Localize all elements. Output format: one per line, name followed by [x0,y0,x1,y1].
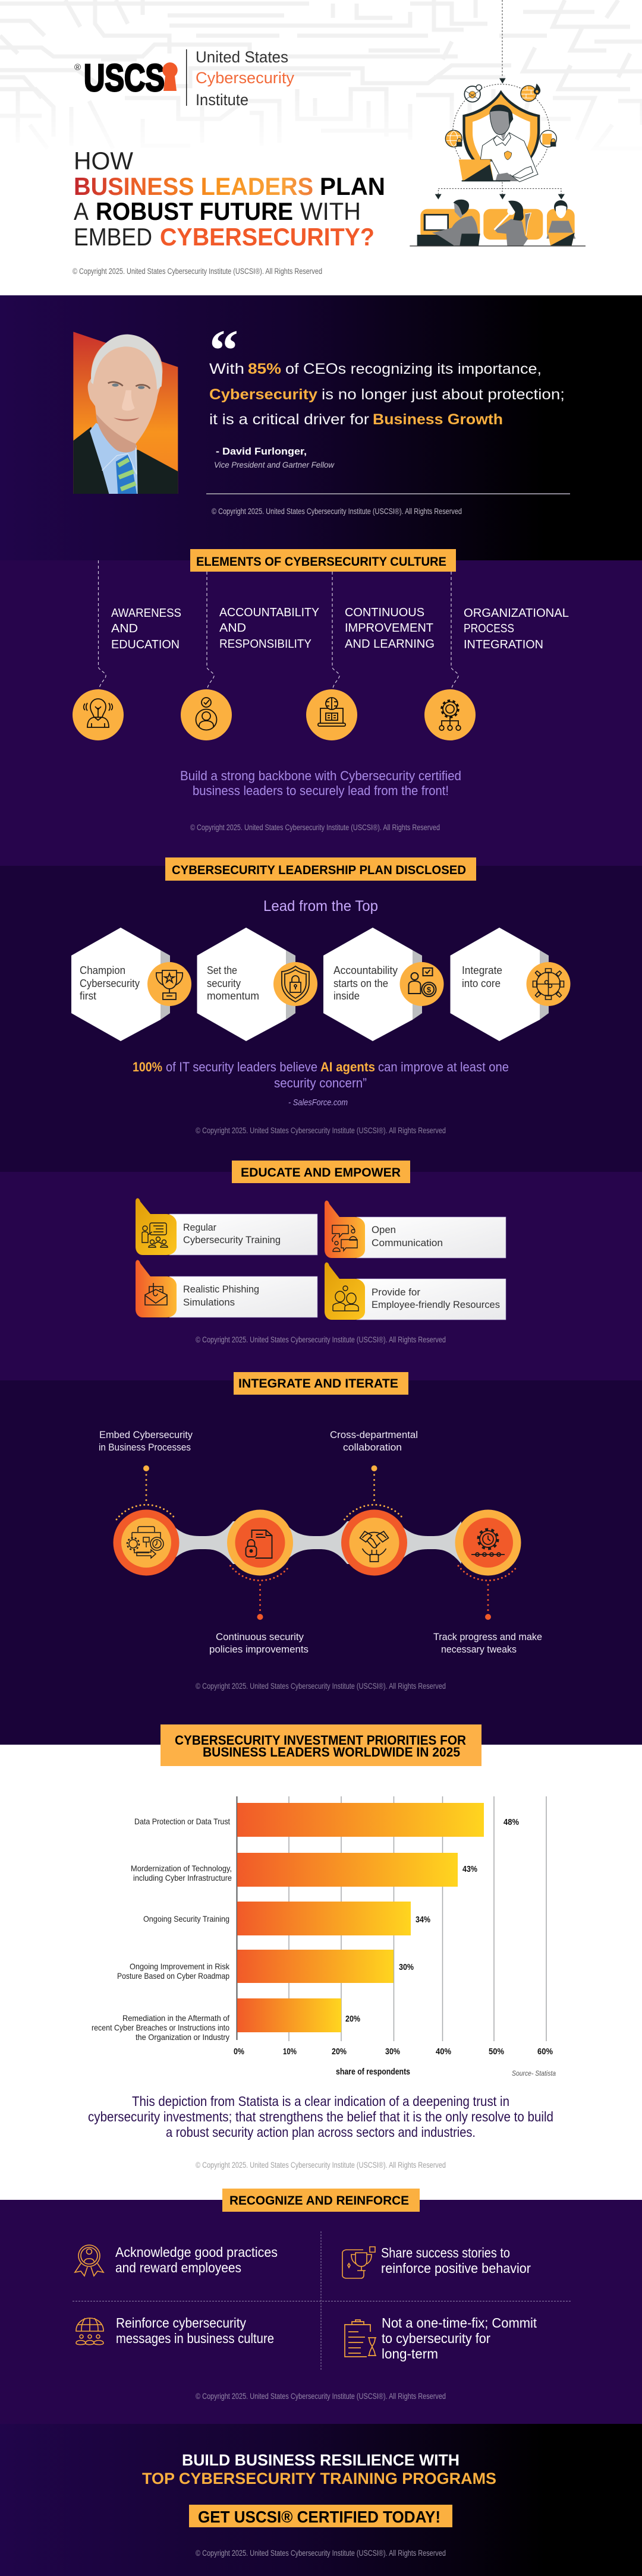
chart commentary [88,2093,553,2140]
item: share success stories: reinforce positive behavior [381,2260,531,2276]
bar chart: 48% [503,1818,519,1827]
panel: investment priorities [0,1724,642,2200]
title: ROBUST FUTURE [96,197,293,225]
copyright: © Copyright 2025. United States Cybersecurity Institute (USCSI®). All Rights Reserved [196,2549,446,2558]
copyright: © Copyright 2025. United States Cybersecurity Institute (USCSI®). All Rights Reserved [212,507,462,516]
heading: CYBERSECURITY LEADERSHIP PLAN DISCLOSED [172,863,466,877]
bar chart: 40% [436,2047,451,2057]
logo: USCSI: USCS [84,56,165,99]
element: organizational process integration: ORGANIZATIONAL [464,607,569,620]
hexagon: accountability starts on the inside [323,928,443,1041]
statistic callout: AI agents [320,1060,375,1074]
logo: USCSI: ® [74,62,81,72]
icon: idea bulb head [73,689,124,740]
title: BUSINESS LEADERS [74,172,313,200]
hexagon: set the security momentum: security [207,978,241,989]
step: embed cybersecurity in business processes: Embed Cybersecurity [99,1429,193,1440]
title: HOW [74,147,133,175]
title: A [74,197,89,225]
item: commit to cybersecurity long-term: to cybersecurity for [382,2331,490,2346]
heading: INTEGRATE AND ITERATE [238,1377,398,1391]
statistic callout: - SalesForce.com [288,1098,348,1108]
subheading: Lead from the Top [263,898,378,915]
step: embed cybersecurity in business processes: in Business Processes [99,1442,191,1453]
quote text: Cybersecurity [209,386,317,403]
element: organizational process integration: PROCESS [464,622,514,635]
statistic callout: security concern” [274,1076,367,1090]
element: continuous improvement and learning [345,606,435,651]
hexagon: champion cybersecurity: Champion [80,964,125,976]
hexagon: champion cybersecurity: first [80,990,96,1002]
item: commit to cybersecurity long-term: Not a one-time-fix; Commit [382,2315,537,2331]
heading [222,2189,420,2212]
hexagon: integrate into core: Integrate [462,964,502,976]
panel: elements of cybersecurity culture [0,549,642,866]
panel: educate and empower [0,1161,642,1380]
hexagon: set the security momentum: momentum [207,990,259,1002]
step: continuous security policies improvements [209,1509,309,1655]
panel: call to action [0,2424,642,2576]
card: regular cybersecurity training: Regular [183,1222,216,1233]
bar chart: Source- Statista [512,2069,556,2077]
element: accountability and responsibility [219,606,319,651]
logo: USCSI [74,48,295,109]
bar chart: Data Protection or Data Trust [134,1817,230,1826]
bar chart: Ongoing Improvement in Risk [130,1962,230,1971]
step connector band [169,1521,461,1564]
quote text: With [209,361,244,377]
quote text: is no longer just about protection; [322,386,565,403]
item: acknowledge good practices: Acknowledge good practices [115,2244,278,2260]
title: PLAN [320,172,385,200]
bar chart: 30% [399,1963,414,1972]
heading [165,857,476,881]
step: continuous security policies improvements: policies improvements [209,1644,309,1655]
CTA heading [142,2451,496,2487]
quote author [214,446,335,469]
heading [234,1372,408,1395]
illustration: cybersecurity leader and team [410,0,586,246]
logo: USCSI: Cybersecurity [196,69,295,87]
copyright: © Copyright 2025. United States Cybersecurity Institute (USCSI®). All Rights Reserved [196,1126,446,1135]
heading: CYBERSECURITY INVESTMENT PRIORITIES FOR [175,1733,466,1748]
bar chart: 60% [537,2047,553,2057]
card: open communication [325,1200,506,1258]
step: cross-departmental collaboration [330,1429,418,1576]
panel: leadership plan [0,857,642,1172]
card: employee-friendly resources: Provide for [372,1287,420,1298]
portrait: David Furlonger [73,332,178,494]
hexagon: accountability starts on the inside: Accountability [333,964,398,976]
heading: BUSINESS LEADERS WORLDWIDE IN 2025 [203,1745,460,1760]
bar chart: the Organization or Industry [136,2032,229,2042]
copyright: © Copyright 2025. United States Cybersecurity Institute (USCSI®). All Rights Reserved [190,823,440,832]
card: regular cybersecurity training: Cybersecurity Training [183,1234,281,1246]
card: realistic phishing simulations [136,1260,317,1317]
step: track progress and make necessary tweaks [433,1509,542,1655]
heading [232,1161,410,1183]
chart commentary: This depiction from Statista is a clear indication of a deepening trust in [132,2093,509,2109]
element: continuous improvement and learning: CONTINUOUS [345,606,424,619]
heading [190,549,456,572]
card: employee-friendly resources [325,1262,506,1320]
callout text: Build a strong backbone with Cybersecurity certified [180,768,461,783]
element: organizational process integration: INTEGRATION [464,638,543,651]
item: share success stories [342,2245,531,2278]
bar chart: Ongoing Security Training [143,1914,229,1924]
quote text: of CEOs recognizing its importance, [285,361,542,377]
hexagon: champion cybersecurity: Cybersecurity [80,978,140,989]
bar chart: 30% [385,2047,400,2057]
quote author: - David Furlonger, [216,446,307,457]
card: realistic phishing simulations: Simulations [183,1297,235,1308]
callout text [180,768,461,798]
bar chart: Mordernization of Technology, [131,1864,232,1873]
hexagon: accountability starts on the inside: inside [333,990,360,1002]
bar chart: 0% [234,2047,244,2057]
quote text: 85% [248,361,281,377]
CTA heading: TOP CYBERSECURITY TRAINING PROGRAMS [142,2470,496,2487]
logo: USCSI: United States [196,48,288,66]
callout text: business leaders to securely lead from the front! [193,783,449,798]
bar chart: Posture Based on Cyber Roadmap [117,1971,229,1981]
statistic callout: can improve at least one [378,1060,509,1074]
bar chart: 20% [345,2014,360,2024]
card: open communication: Communication [372,1237,443,1248]
element: awareness and education [111,607,181,651]
statistic callout: 100% [133,1060,162,1074]
panel: recognize and reinforce [0,2189,642,2424]
bar chart: recent Cyber Breaches or Instructions into [92,2023,229,2032]
quote text: Business Growth [373,411,503,428]
item: commit to cybersecurity long-term: long-term [382,2346,438,2361]
bar chart: 20% [332,2047,347,2057]
panel: hero [0,0,642,295]
step: track progress and make necessary tweaks: Track progress and make [433,1631,542,1642]
chart commentary: a robust security action plan across sectors and industries. [166,2124,476,2140]
panel: quote [0,295,642,560]
icon: gear and process tree [424,689,476,740]
bar chart: Remediation in the Aftermath of [122,2013,229,2023]
item: acknowledge good practices: and reward employees [115,2260,241,2275]
hexagon: integrate into core [451,928,571,1041]
title: CYBERSECURITY? [160,223,374,251]
hexagon: accountability starts on the inside: $ [427,985,432,994]
copyright: © Copyright 2025. United States Cybersecurity Institute (USCSI®). All Rights Reserved [73,267,322,276]
hexagon: champion cybersecurity [71,928,191,1041]
bar chart: share of respondents [336,2067,410,2077]
bar chart [92,1796,556,2077]
item: commit to cybersecurity long-term [345,2315,537,2361]
bar chart: including Cyber Infrastructure [133,1873,232,1883]
statistic callout [133,1060,509,1108]
item: acknowledge good practices [75,2244,278,2276]
bar chart: 43% [462,1865,477,1874]
hexagon: integrate into core: into core [462,978,501,989]
element: continuous improvement and learning: AND LEARNING [345,638,435,651]
element: awareness and education: AWARENESS [111,607,181,620]
bar chart: 34% [416,1915,430,1925]
panel: integrate and iterate [0,1372,642,1745]
logo: USCSI: Institute [196,91,248,109]
card: regular cybersecurity training [136,1198,317,1255]
card: open communication: Open [372,1224,396,1235]
icon: person with check [181,689,232,740]
heading: RECOGNIZE AND REINFORCE [229,2194,409,2208]
step: continuous security policies improvements: Continuous security [216,1631,304,1642]
copyright: © Copyright 2025. United States Cybersecurity Institute (USCSI®). All Rights Reserved [196,1682,446,1691]
element: awareness and education: EDUCATION [111,638,180,651]
quote mark: “ [209,319,238,383]
item: reinforce cybersecurity messages: messages in business culture [116,2331,274,2346]
card: employee-friendly resources: Employee-friendly Resources [372,1299,500,1310]
step: embed cybersecurity in business processes [99,1429,193,1576]
heading [160,1724,482,1766]
bar chart: 10% [283,2047,297,2057]
heading: EDUCATE AND EMPOWER [241,1166,401,1180]
heading: ELEMENTS OF CYBERSECURITY CULTURE [196,555,446,569]
card: realistic phishing simulations: Realistic Phishing [183,1284,259,1295]
step: cross-departmental collaboration: collaboration [343,1442,402,1453]
element: accountability and responsibility: AND [219,622,246,635]
chart commentary: cybersecurity investments; that strengthens the belief that it is the only resolve to build [88,2109,553,2124]
element: awareness and education: AND [111,622,138,635]
copyright: © Copyright 2025. United States Cybersecurity Institute (USCSI®). All Rights Reserved [196,2161,446,2170]
icon: laptop with brain and book [306,689,357,740]
CTA heading: BUILD BUSINESS RESILIENCE WITH [182,2451,460,2469]
hexagon: set the security momentum: Set the [207,964,237,976]
item: share success stories: Share success stories to [381,2245,510,2260]
title [74,147,385,251]
bar chart: 50% [489,2047,504,2057]
copyright: © Copyright 2025. United States Cybersecurity Institute (USCSI®). All Rights Reserved [196,1335,446,1344]
quote text: it is a critical driver for [209,411,369,428]
title: EMBED [74,223,152,251]
quote author: Vice President and Gartner Fellow [214,460,335,469]
statistic callout: of IT security leaders believe [166,1060,317,1074]
item: reinforce cybersecurity messages [76,2315,274,2346]
CTA button: GET USCSI® CERTIFIED TODAY! [198,2508,440,2526]
element: accountability and responsibility: ACCOUNTABILITY [219,606,319,619]
hexagon: accountability starts on the inside: starts on the [333,978,388,989]
element: accountability and responsibility: RESPONSIBILITY [219,638,311,651]
item: reinforce cybersecurity messages: Reinforce cybersecurity [116,2315,246,2331]
step: cross-departmental collaboration: Cross-departmental [330,1429,418,1440]
element: continuous improvement and learning: IMPROVEMENT [345,622,433,635]
quote text [209,361,565,428]
hexagon: set the security momentum [197,928,317,1041]
title: WITH [300,197,361,225]
step: track progress and make necessary tweaks: necessary tweaks [441,1644,517,1655]
element: organizational process integration [464,607,569,651]
copyright: © Copyright 2025. United States Cybersecurity Institute (USCSI®). All Rights Reserved [196,2392,446,2401]
